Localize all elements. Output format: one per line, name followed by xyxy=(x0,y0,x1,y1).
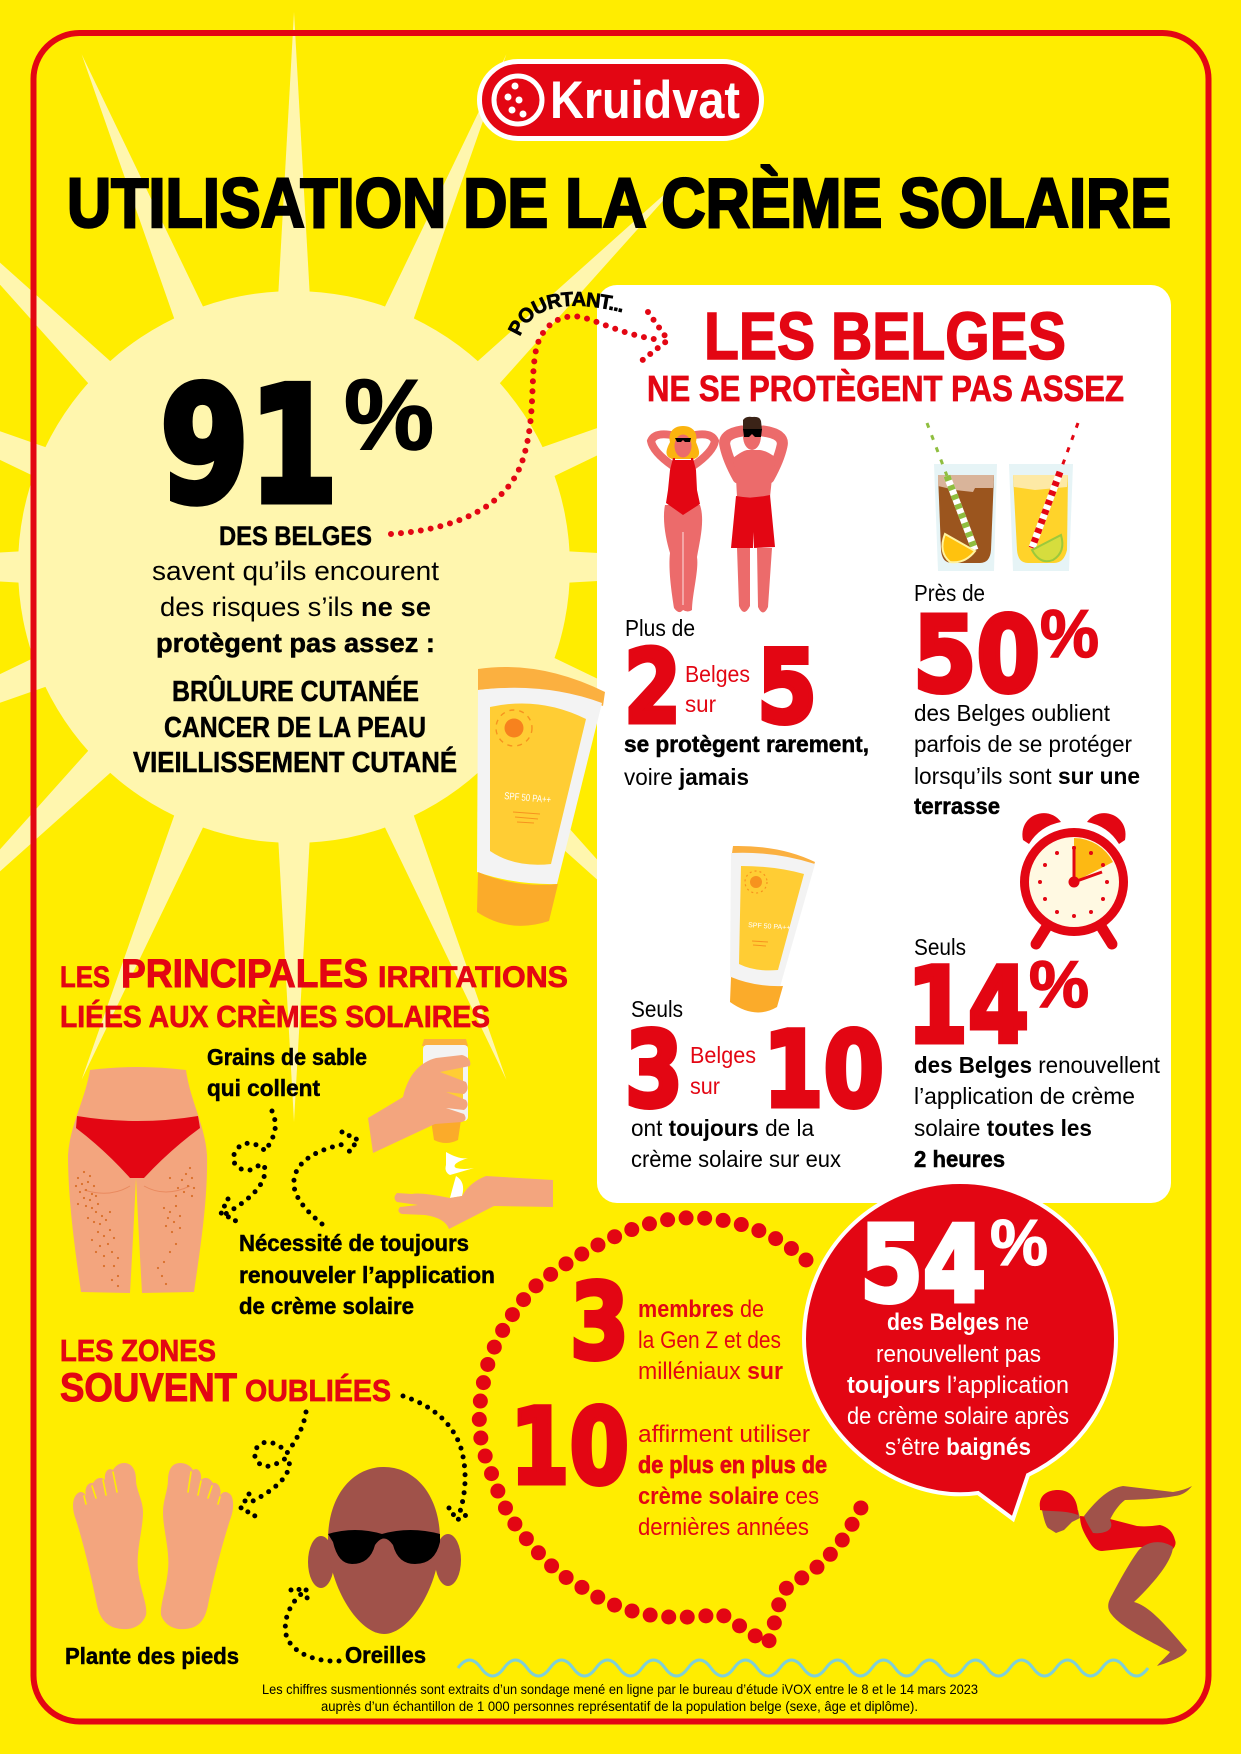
footnote: auprès d’un échantillon de 1 000 personnes représentatif de la population belge (sexe, âge et diplôme). xyxy=(321,1698,918,1714)
dotted arrow: oreilles haut xyxy=(403,1396,470,1520)
label: grains de sable: Grains de sable xyxy=(207,1044,367,1070)
stat: 3 belges sur 10 xyxy=(625,996,884,1172)
stat: 2 belges sur 5: Belges xyxy=(685,661,750,687)
stat: 2 belges sur 5: Plus de xyxy=(625,615,695,641)
logo: Kruidvat xyxy=(480,62,762,138)
text: gen z stat: de plus en plus de xyxy=(638,1452,827,1479)
dotted arrow: pieds xyxy=(241,1412,306,1516)
stat: 3 belges sur 10: Belges xyxy=(690,1042,756,1068)
stat: 50% terrasse: lorsqu’ils sont sur une xyxy=(914,763,1140,789)
stat: 14%: Seuls xyxy=(914,934,966,960)
icon: alarm clock xyxy=(1022,813,1126,944)
speech bubble: 54%: s’être baignés xyxy=(885,1434,1031,1461)
label: necessite: Nécessité de toujours xyxy=(239,1230,469,1256)
dotted speech bubble ring xyxy=(479,1218,868,1644)
heading: zones oubliees: LES ZONES xyxy=(60,1333,216,1368)
illustration: swimmer xyxy=(1040,1486,1192,1666)
label: oreilles: Oreilles xyxy=(345,1642,426,1668)
speech bubble: 54%: des Belges ne xyxy=(887,1309,1029,1336)
stat: 50% terrasse xyxy=(913,580,1140,819)
stat: 14%: l’application de crème xyxy=(914,1083,1135,1109)
footnote xyxy=(262,1681,978,1714)
stat: 3 belges sur 10: 3 xyxy=(625,1009,683,1131)
text: risques: des risques s’ils ne se xyxy=(160,592,431,622)
water wave xyxy=(458,1660,1148,1676)
text: gen z stat xyxy=(510,1261,827,1541)
statistic: 91%: % xyxy=(344,359,434,471)
dotted arrow: pourtant xyxy=(391,312,668,534)
speech bubble: 54%: de crème solaire après xyxy=(847,1403,1069,1430)
speech bubble: 54% xyxy=(804,1182,1116,1519)
stat: 14%: 2 heures xyxy=(914,1146,1005,1172)
illustration: large sunscreen tube xyxy=(477,667,605,926)
illustration: man sunbathing xyxy=(725,417,782,612)
stat: 3 belges sur 10: Seuls xyxy=(631,996,683,1022)
speech bubble: 54%: 54 xyxy=(860,1204,986,1326)
text: gen z stat: 3 xyxy=(570,1261,629,1383)
stat: 50% terrasse: des Belges oublient xyxy=(914,700,1111,726)
heading: principales irritations: LIÉES AUX CRÈMES SOLAIRES xyxy=(60,999,490,1034)
stat: 3 belges sur 10: ont toujours de la xyxy=(631,1115,814,1141)
text: risques xyxy=(133,521,457,779)
stat: 2 belges sur 5: sur xyxy=(685,691,716,717)
illustration: open hand xyxy=(394,1176,553,1229)
stat: 3 belges sur 10: sur xyxy=(690,1073,720,1099)
stat: 2 belges sur 5: 5 xyxy=(757,628,817,746)
text: risques: VIEILLISSEMENT CUTANÉ xyxy=(133,745,457,779)
dotted arrow: grains de sable xyxy=(221,1111,275,1221)
stat: 2 belges sur 5: voire jamais xyxy=(624,764,749,790)
label: plante des pieds: Plante des pieds xyxy=(65,1643,239,1669)
heading: zones oubliees xyxy=(60,1333,391,1410)
text: gen z stat: crème solaire ces xyxy=(638,1483,819,1510)
text: risques: CANCER DE LA PEAU xyxy=(164,712,426,744)
label: necessite: de crème solaire xyxy=(239,1293,414,1319)
stat: 50% terrasse: terrasse xyxy=(914,793,1000,819)
stat: 3 belges sur 10: crème solaire sur eux xyxy=(631,1146,841,1172)
text: gen z stat: la Gen Z et des xyxy=(638,1327,781,1354)
illustration: small sunscreen tube: SPF 50 PA++ xyxy=(748,922,791,932)
stat: 3 belges sur 10: 10 xyxy=(763,1009,884,1131)
statistic: 91%: 91 xyxy=(160,352,338,539)
illustration: iced drinks xyxy=(927,423,1078,571)
text: gen z stat: milléniaux sur xyxy=(638,1358,783,1385)
stat: 14%: % xyxy=(1029,947,1089,1021)
label: necessite xyxy=(239,1230,495,1319)
stat: 14% xyxy=(907,934,1161,1172)
text: gen z stat: affirment utiliser xyxy=(638,1421,810,1448)
label: grains de sable xyxy=(207,1044,367,1101)
stat: 14%: solaire toutes les xyxy=(914,1115,1092,1141)
text: risques: DES BELGES xyxy=(219,521,372,551)
sun xyxy=(0,12,849,1122)
heading: principales irritations: LES xyxy=(60,961,110,994)
heading: les belges: NE SE PROTÈGENT PAS ASSEZ xyxy=(647,368,1124,409)
heading: les belges xyxy=(647,299,1124,409)
stat: 50% terrasse: 50 xyxy=(913,594,1040,716)
white panel xyxy=(597,285,1171,1203)
speech bubble: 54%: renouvellent pas xyxy=(876,1341,1041,1368)
heading: les belges: LES BELGES xyxy=(704,299,1066,374)
stat: 2 belges sur 5 xyxy=(624,615,869,790)
text: gen z stat: dernières années xyxy=(638,1514,809,1541)
heading: principales irritations xyxy=(60,952,568,1034)
illustration: large sunscreen tube: SPF 50 PA++ xyxy=(504,791,552,806)
speech bubble: 54%: toujours l’application xyxy=(847,1372,1069,1399)
illustration: woman sunbathing xyxy=(651,426,715,612)
illustration: head with sunglasses xyxy=(308,1467,461,1634)
stat: 2 belges sur 5: se protègent rarement, xyxy=(624,731,869,757)
illustration: hips with sand xyxy=(68,1067,207,1293)
label: grains de sable: qui collent xyxy=(207,1075,320,1101)
text: gen z stat: membres de xyxy=(638,1296,764,1323)
stat: 50% terrasse: parfois de se protéger xyxy=(914,731,1132,757)
stat: 50% terrasse: % xyxy=(1040,596,1099,672)
label: pourtant: POURTANT... xyxy=(508,292,622,336)
logo: Kruidvat: Kruidvat xyxy=(550,71,740,130)
heading: principales irritations: IRRITATIONS xyxy=(378,961,568,994)
label: oreilles xyxy=(285,1589,426,1668)
stat: 14%: des Belges renouvellent xyxy=(914,1052,1161,1078)
heading: zones oubliees: OUBLIÉES xyxy=(245,1373,391,1408)
label: necessite: renouveler l’application xyxy=(239,1262,495,1288)
stat: 2 belges sur 5: 2 xyxy=(624,628,681,746)
speech bubble: 54%: % xyxy=(990,1206,1048,1279)
illustration: hand holding tube xyxy=(368,1039,474,1198)
text: risques: savent qu’ils encourent xyxy=(152,556,440,586)
dotted arrow: renouveler xyxy=(294,1132,358,1224)
illustration: feet xyxy=(73,1463,233,1629)
stat: 14%: 14 xyxy=(907,945,1029,1067)
footnote: Les chiffres susmentionnés sont extraits d’un sondage mené en ligne par le bureau d’étude iVOX entre le 8 et le 14 mars 2023 xyxy=(262,1681,978,1697)
illustration: small sunscreen tube xyxy=(730,846,815,1012)
heading: zones oubliees: SOUVENT xyxy=(60,1366,237,1410)
text: risques: BRÛLURE CUTANÉE xyxy=(172,674,419,708)
heading: principales irritations: PRINCIPALES xyxy=(121,952,368,996)
text: gen z stat: 10 xyxy=(510,1386,629,1508)
stat: 50% terrasse: Près de xyxy=(914,580,985,606)
text: risques: protègent pas assez : xyxy=(156,628,435,658)
